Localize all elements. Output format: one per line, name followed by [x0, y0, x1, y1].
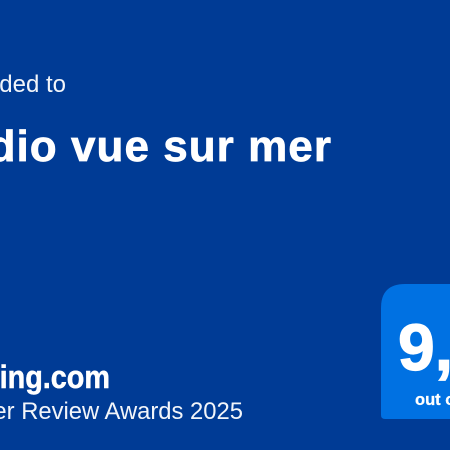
badge background [381, 284, 450, 419]
score badge [381, 284, 450, 419]
